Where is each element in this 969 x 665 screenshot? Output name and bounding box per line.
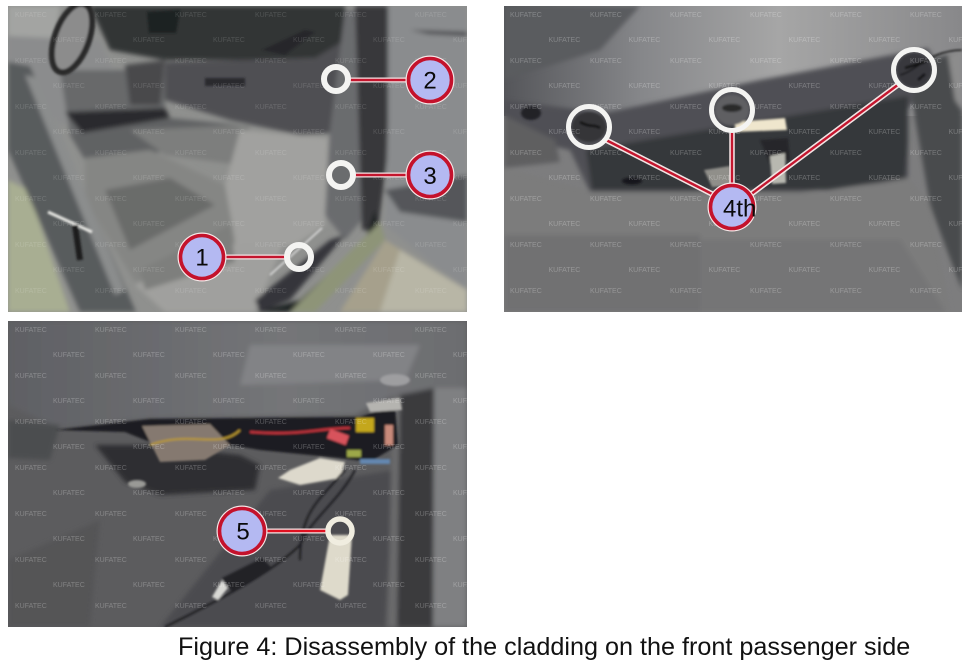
callout 4th: three leader lines and target rings xyxy=(568,50,934,196)
badge 1 xyxy=(178,232,226,282)
callout 3: leader line and target ring xyxy=(329,163,410,187)
callout 5: leader line and target ring xyxy=(265,519,352,543)
badge 3 xyxy=(406,150,454,200)
badge 4th xyxy=(708,182,756,232)
figure caption: Figure 4: Disassembly of the cladding on the front passenger side xyxy=(178,633,910,661)
badge 4th: 4th xyxy=(723,196,756,222)
badge 3: 3 xyxy=(423,163,437,190)
callout 1: leader line and target ring xyxy=(225,245,311,269)
badge 2 xyxy=(406,56,454,104)
badge 1: 1 xyxy=(195,244,209,272)
badge 5 xyxy=(216,506,268,556)
callout 2: leader line and target ring xyxy=(324,67,410,91)
photo: exposed wiring and control module xyxy=(8,321,467,627)
photo: cladding underside with three fasteners xyxy=(504,6,962,312)
photo: passenger footwell with door open xyxy=(8,0,467,312)
badge 2: 2 xyxy=(423,68,437,94)
badge 5: 5 xyxy=(236,518,250,546)
